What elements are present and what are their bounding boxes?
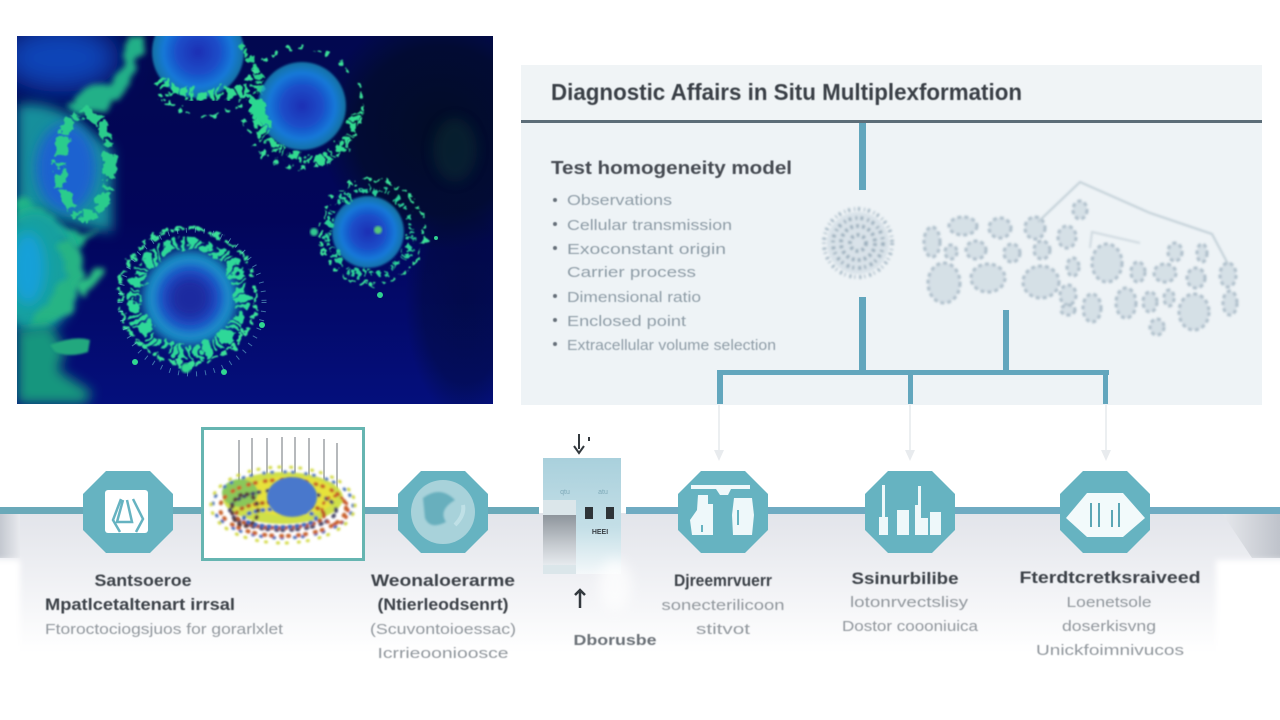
bullet list: Dimensional ratio [567, 289, 701, 306]
panel: diagnostic details [521, 65, 1262, 405]
scattered dots [211, 467, 355, 543]
step 2: nucleus icon [398, 471, 488, 553]
bullet list: Exoconstant origin [567, 241, 726, 258]
label: stability: Dostor coooniuica [842, 618, 979, 635]
step labels [45, 568, 1200, 662]
label: discovery: Djreemrvuerr [674, 571, 772, 590]
label: measurement: (Scuvontoioessac) [370, 621, 516, 638]
large lower cell [120, 228, 265, 375]
top cell [150, 36, 266, 120]
illustration: cell cluster [924, 182, 1237, 335]
step 3: instrument device: HEEI [592, 529, 608, 536]
label: sample: Mpatlcetaltenart irrsal [45, 595, 235, 614]
subheading: Test homogeneity model [551, 158, 792, 178]
microscope image: fluorescent cells [17, 36, 493, 404]
chart box: cell dot plot [202, 428, 364, 560]
label: resolved [1020, 568, 1200, 659]
connector lines [717, 123, 1109, 404]
bullet list [553, 192, 776, 354]
step 6: lens icon [1060, 471, 1150, 553]
label: measurement: (Ntierleodsenrt) [378, 595, 508, 614]
vertical marker lines [239, 437, 337, 498]
label: sample [45, 571, 284, 638]
faint arrows to steps [714, 405, 1111, 461]
label: stability: lotonrvectslisy [850, 594, 969, 611]
step 1: flask icon [83, 471, 173, 553]
bullet list: Observations [567, 192, 672, 209]
label: resolved: doserkisvng [1062, 618, 1156, 635]
bullet list: Enclosed point [567, 313, 687, 330]
step 3: instrument device [543, 434, 656, 649]
bullet list: Extracellular volume selection [567, 337, 776, 354]
label: discovery: sonecterilicoon [662, 597, 784, 614]
background band [0, 513, 1280, 670]
bullet list: Cellular transmission [567, 217, 732, 234]
label: sample: Ftoroctociogsjuos for gorarlxlet [45, 621, 284, 638]
label: resolved: Fterdtcretksraiveed [1020, 568, 1200, 587]
label: resolved: Unickfoimnivucos [1036, 642, 1184, 659]
label: discovery: stitvot [696, 621, 751, 638]
label: stability: Ssinurbilibe [852, 569, 958, 588]
label: measurement: Weonaloerarme [371, 571, 515, 590]
label: stability [842, 569, 979, 635]
device label: Dborusbe [574, 632, 656, 649]
step 5: bars icon [865, 471, 955, 553]
heading rule [521, 120, 1262, 123]
panel heading: Diagnostic Affairs in Situ Multiplexformation [551, 79, 1022, 105]
step 4: blocks icon [678, 471, 768, 553]
label: measurement [370, 571, 516, 662]
timeline line [0, 507, 1280, 514]
label: measurement: Icrrieoonioosce [378, 645, 508, 662]
arrow in [574, 434, 589, 453]
step 3: instrument device: qtu [560, 489, 570, 496]
bullet list: Carrier process [567, 264, 696, 281]
arrow out [575, 590, 585, 608]
right cell [310, 180, 438, 298]
step 3: instrument device: atu [598, 489, 608, 496]
label: discovery [662, 571, 784, 638]
left green-blue cell masses [17, 36, 149, 404]
label: resolved: Loenetsole [1066, 594, 1152, 611]
upper right cell [242, 48, 362, 168]
illustration: single cell [824, 209, 892, 277]
label: sample: Santsoeroe [94, 571, 192, 590]
